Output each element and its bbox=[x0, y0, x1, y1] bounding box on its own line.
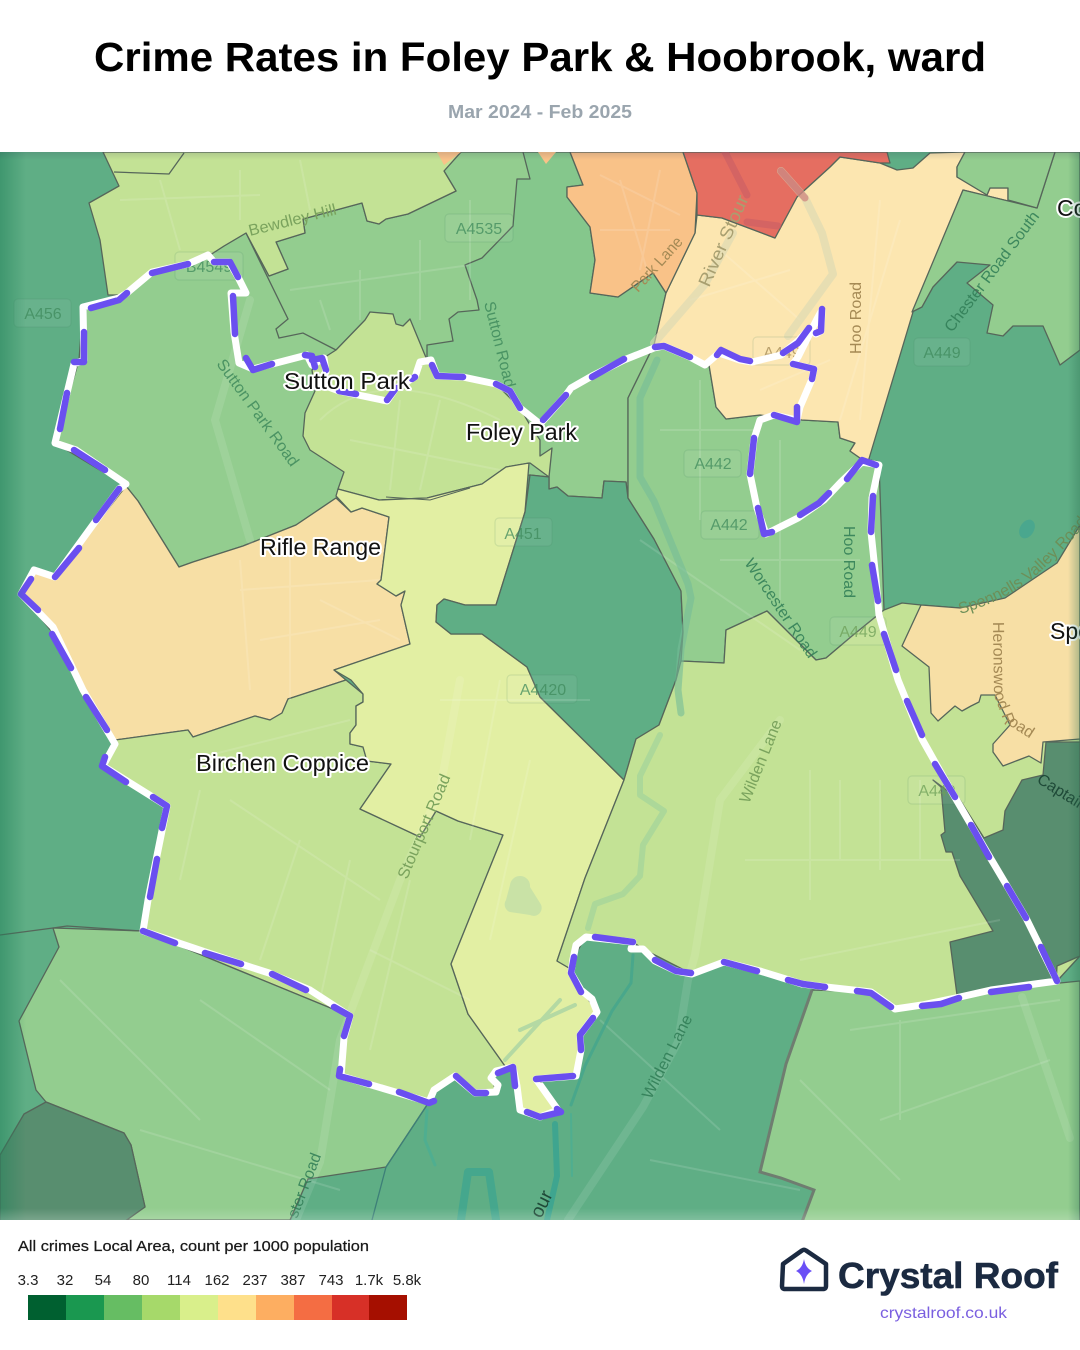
road names: Sutton Park Road bbox=[213, 356, 302, 470]
road shields: A442 bbox=[710, 517, 748, 534]
legend scale labels: 80 bbox=[133, 1272, 149, 1289]
place names bbox=[196, 195, 1080, 776]
legend scale labels: 162 bbox=[204, 1272, 230, 1289]
road names: Stourport Road bbox=[395, 772, 454, 882]
legend scale labels: 387 bbox=[280, 1272, 306, 1289]
legend scale labels: 3.3 bbox=[18, 1272, 38, 1289]
logo url: crystalroof.co.uk bbox=[880, 1305, 1008, 1322]
road names: our bbox=[527, 1187, 558, 1221]
Crystal Roof logo bbox=[782, 1250, 1059, 1322]
place names: Foley Park bbox=[466, 419, 577, 445]
icon: house with star bbox=[782, 1250, 826, 1289]
road names: Park Lane bbox=[628, 234, 687, 296]
place names: Rifle Range bbox=[260, 534, 381, 560]
area boundary lines bbox=[0, 153, 814, 1222]
road shields: A449 bbox=[918, 783, 956, 800]
road shields: A442 bbox=[694, 456, 732, 473]
road names: ster Road bbox=[285, 1151, 325, 1220]
legend scale labels: 237 bbox=[242, 1272, 268, 1289]
legend bbox=[18, 1238, 422, 1320]
road shields: A451 bbox=[504, 526, 542, 543]
road names: Sutton Road bbox=[480, 300, 518, 389]
road shields: B4549 bbox=[186, 259, 232, 276]
road shields bbox=[14, 214, 970, 804]
road shields: A4535 bbox=[456, 221, 502, 238]
road shields: A456 bbox=[24, 306, 62, 323]
rivers bbox=[425, 152, 833, 1220]
road names: Hoo Road bbox=[840, 526, 857, 598]
road names: River Stour bbox=[694, 192, 753, 290]
road names: Hoo Road bbox=[848, 282, 865, 354]
local streets and land texture bbox=[60, 160, 1060, 1190]
legend scale labels bbox=[18, 1272, 422, 1289]
road names bbox=[198, 195, 1080, 1218]
road shields: A449 bbox=[839, 624, 877, 641]
subtitle: date range: Mar 2024 - Feb 2025 bbox=[448, 102, 632, 122]
legend scale labels: 114 bbox=[167, 1272, 191, 1289]
title: Crime Rates in Foley Park & Hoobrook, ward bbox=[94, 34, 986, 80]
legend scale labels: 5.8k bbox=[393, 1272, 422, 1289]
road names: Heronswood Road bbox=[993, 623, 1036, 738]
road names: Bewdley Hill bbox=[247, 202, 338, 240]
legend colour bar bbox=[28, 1295, 407, 1320]
road shields: A4420 bbox=[520, 682, 566, 699]
road shields: A449 bbox=[923, 345, 961, 362]
legend title: All crimes Local Area, count per 1000 population bbox=[18, 1238, 369, 1255]
road names: Wilden Lane bbox=[737, 717, 786, 805]
ward boundary: white line with purple dashes bbox=[21, 255, 1057, 1117]
legend scale labels: 1.7k bbox=[355, 1272, 384, 1289]
place names: Sutton Park bbox=[284, 368, 411, 394]
regions: crime rate areas bbox=[0, 152, 1080, 1222]
road names: Chester Road South bbox=[942, 209, 1043, 335]
legend scale labels: 743 bbox=[318, 1272, 344, 1289]
legend scale labels: 54 bbox=[95, 1272, 111, 1289]
legend scale labels: 32 bbox=[57, 1272, 73, 1289]
road shields: A449 bbox=[763, 345, 801, 362]
choropleth map bbox=[0, 152, 1080, 1220]
map edge shading bbox=[0, 152, 1080, 1220]
road names: Wilden Lane bbox=[639, 1012, 696, 1102]
road names: Worcester Road bbox=[741, 556, 820, 661]
ponds bbox=[505, 517, 1038, 916]
place names: Birchen Coppice bbox=[196, 750, 369, 776]
logo wordmark: Crystal Roof bbox=[838, 1255, 1059, 1296]
